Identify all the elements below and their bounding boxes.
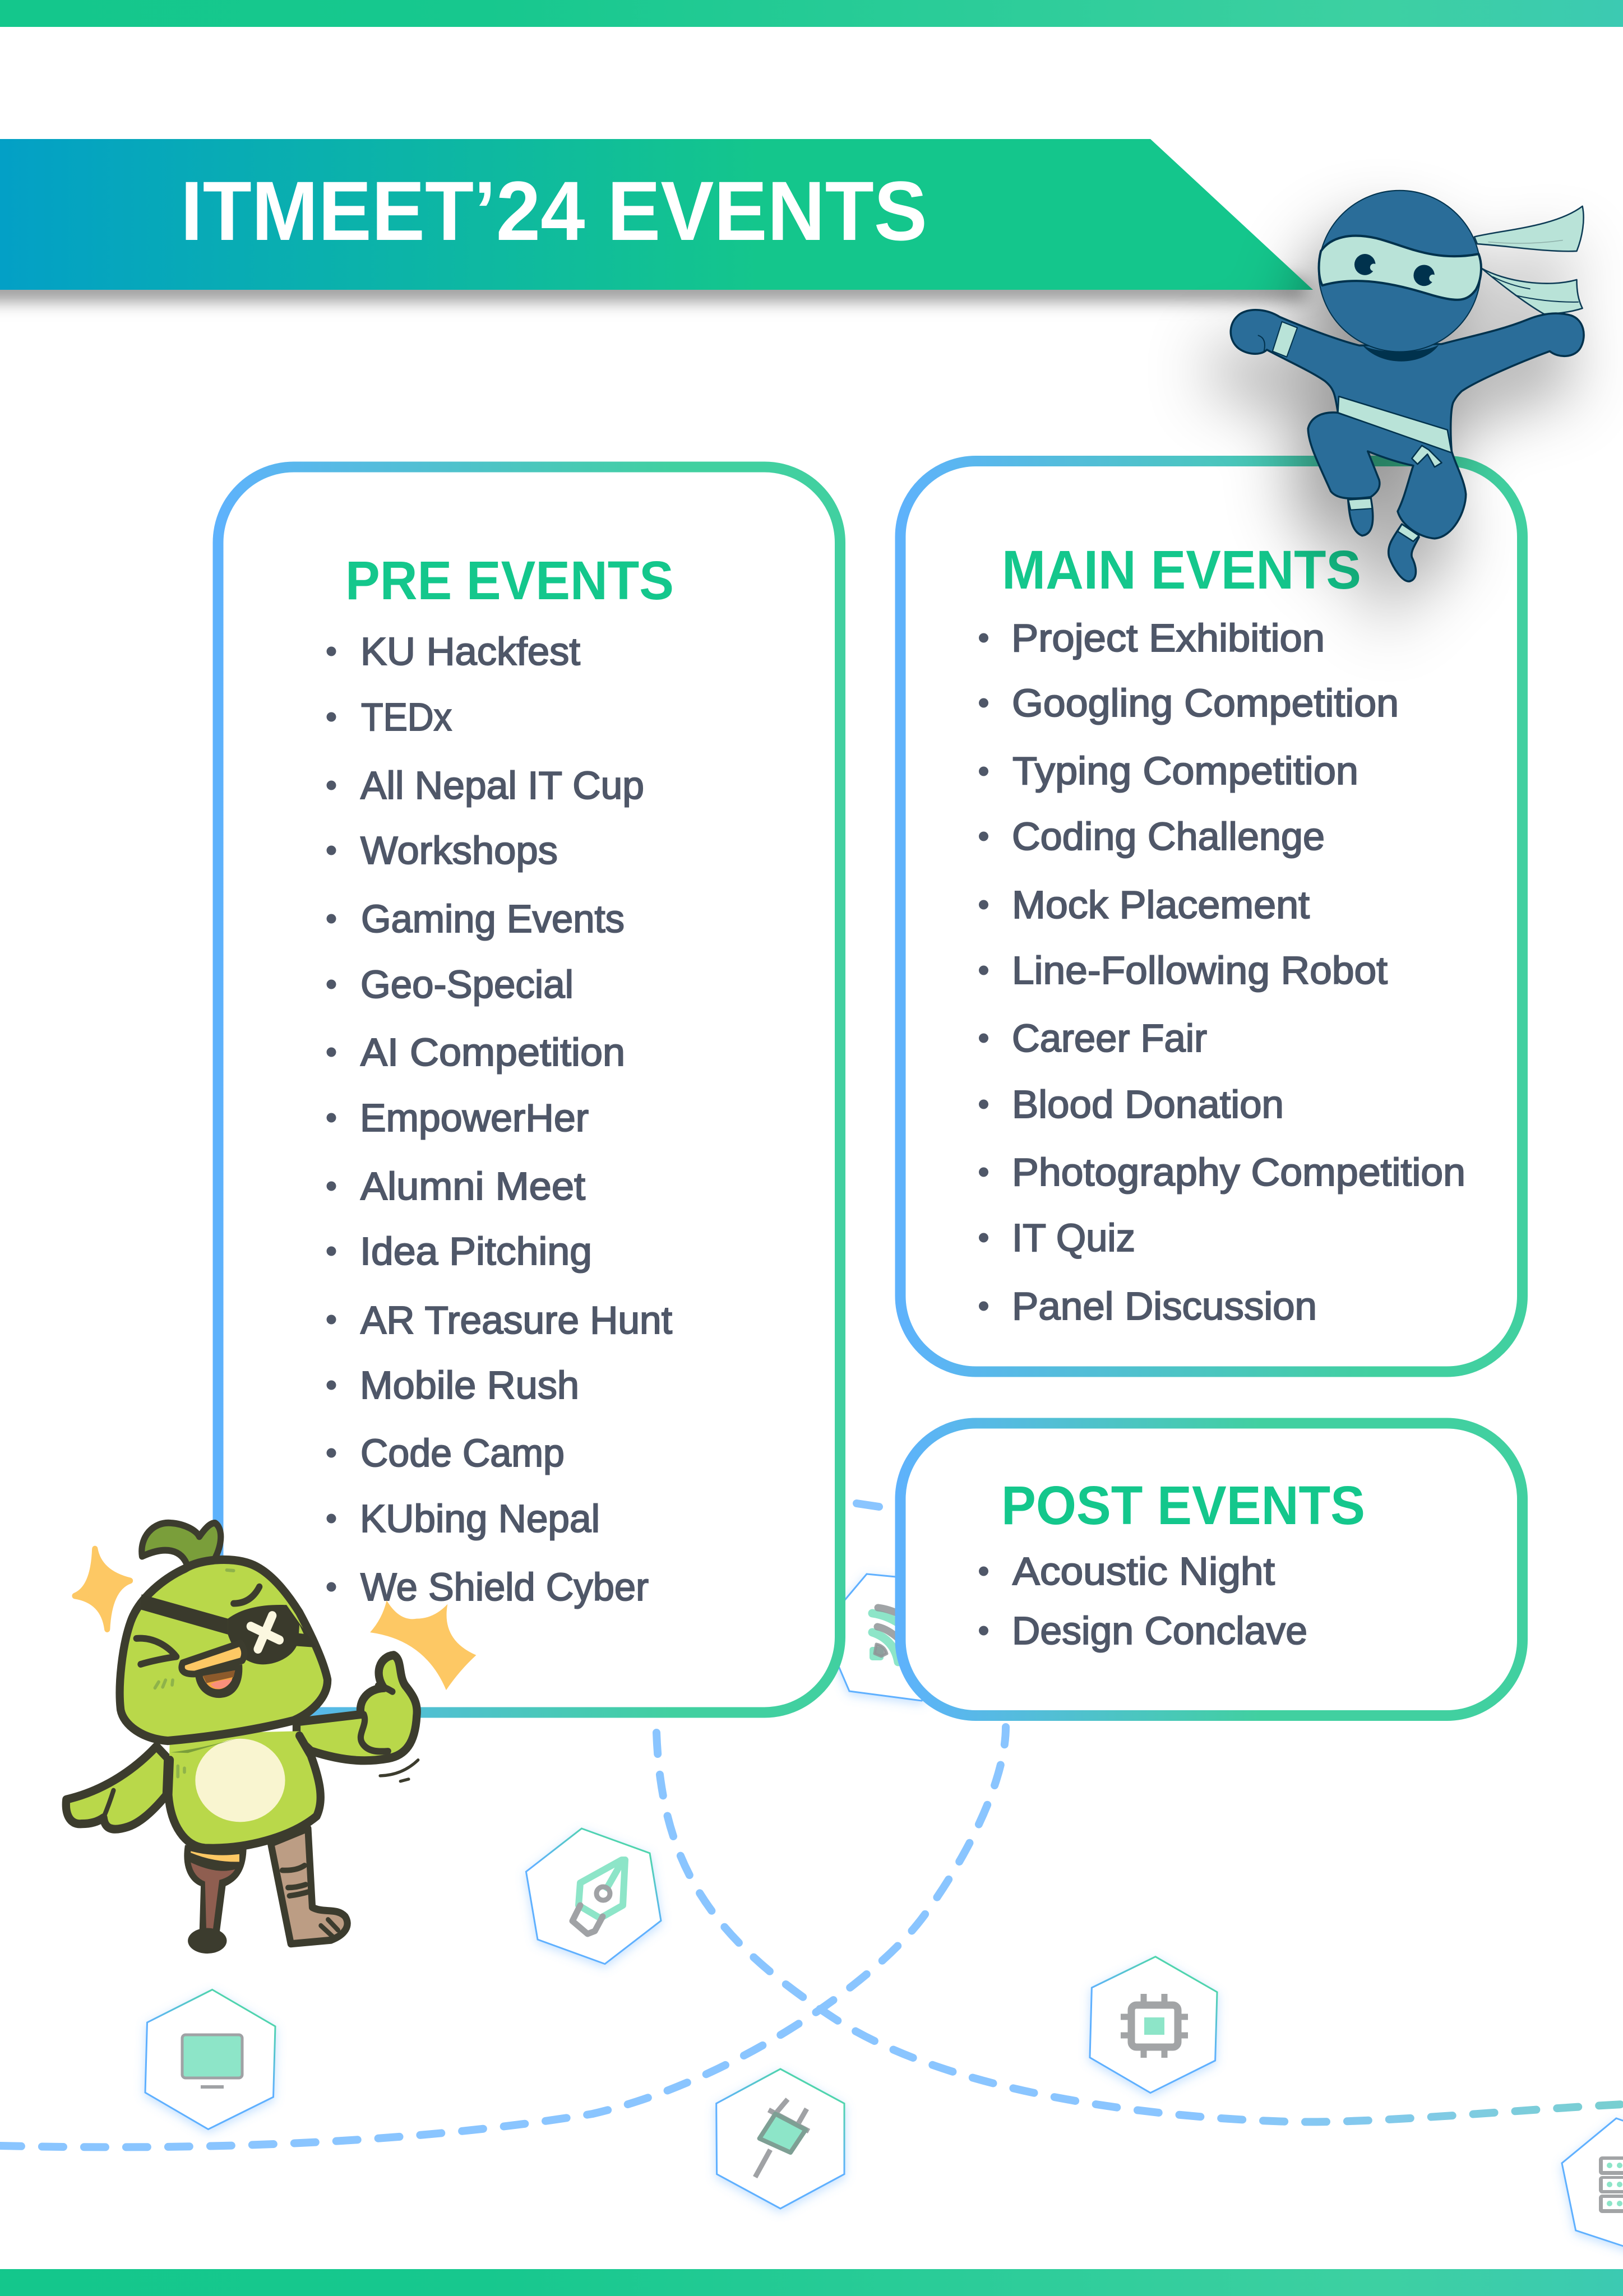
hexagon icon: server	[1562, 2118, 1623, 2251]
panel: post events	[900, 1423, 1523, 1715]
list: main events: Career Fair	[1012, 1016, 1207, 1060]
wing	[66, 1746, 168, 1829]
hexagon icon: pen tool	[526, 1829, 661, 1964]
list: pre events	[326, 629, 672, 1609]
list: pre events: Mobile Rush	[360, 1363, 579, 1407]
belt	[1338, 396, 1451, 453]
top gradient bar	[0, 0, 1623, 27]
torso and arms	[1231, 310, 1584, 451]
head	[1319, 191, 1481, 352]
wrist band	[1273, 322, 1297, 357]
list: pre events: TEDx	[361, 695, 452, 739]
cheek marks	[155, 1570, 234, 1777]
list: pre events: EmpowerHer	[360, 1096, 589, 1140]
list: main events: Coding Challenge	[1012, 814, 1325, 858]
list: pre events: KU Hackfest	[360, 629, 580, 673]
motion lines	[380, 1760, 418, 1781]
list: post events: Design Conclave	[1012, 1609, 1307, 1652]
list: main events: Typing Competition	[1012, 749, 1358, 793]
list: main events	[979, 616, 1465, 1328]
dashed connector: falling curve	[656, 1733, 1623, 2122]
list: main events: Blood Donation	[1012, 1082, 1284, 1126]
list: pre events: AI Competition	[360, 1030, 625, 1074]
panel: main events	[900, 461, 1523, 1372]
list: main events: IT Quiz	[1012, 1216, 1135, 1260]
heading: post events: POST EVENTS	[1001, 1475, 1365, 1536]
list: pre events: We Shield Cyber	[360, 1565, 649, 1609]
heading: pre events: PRE EVENTS	[345, 550, 674, 611]
body	[168, 1731, 321, 1848]
list: pre events: KUbing Nepal	[360, 1497, 600, 1540]
list: pre events: Idea Pitching	[360, 1229, 592, 1273]
bottom gradient bar	[0, 2269, 1623, 2296]
hexagon icon: plug	[716, 2069, 844, 2209]
mouth	[195, 1664, 242, 1698]
beak	[182, 1643, 244, 1674]
heading: main events: MAIN EVENTS	[1002, 539, 1361, 600]
mascot: blue ninja	[1231, 191, 1584, 581]
hexagon icon: chip	[1090, 1957, 1217, 2093]
list: pre events: AR Treasure Hunt	[360, 1298, 672, 1342]
belly	[195, 1739, 285, 1822]
list: pre events: Workshops	[360, 828, 558, 872]
hexagon icon: wifi	[822, 1574, 959, 1701]
list: main events: Googling Competition	[1012, 681, 1399, 725]
dashed connector: fragment between cards	[857, 1503, 879, 1507]
hexagon icon: monitor	[145, 1990, 275, 2129]
list: main events: Mock Placement	[1012, 883, 1310, 927]
list: pre events: Code Camp	[360, 1431, 565, 1475]
legs	[1308, 413, 1466, 581]
right sparkle	[370, 1600, 476, 1690]
list: post events	[979, 1549, 1307, 1652]
headband tails	[1474, 206, 1584, 314]
dashed connector: rising curve	[0, 1727, 1006, 2147]
list: main events: Photography Competition	[1012, 1150, 1465, 1194]
brow and wink	[136, 1587, 260, 1664]
collar	[1362, 345, 1439, 362]
list: pre events: Gaming Events	[361, 897, 625, 941]
list: pre events: All Nepal IT Cup	[360, 763, 644, 807]
arm and thumbs-up hand	[297, 1655, 417, 1761]
legs	[184, 1829, 348, 1954]
list: pre events: Alumni Meet	[360, 1164, 585, 1208]
list: post events: Acoustic Night	[1012, 1549, 1275, 1593]
list: pre events: Geo-Special	[360, 962, 574, 1006]
eyes	[1354, 254, 1436, 286]
leaf	[142, 1523, 221, 1567]
panel: pre events	[218, 467, 840, 1712]
eyepatch	[141, 1594, 317, 1664]
list: main events: Line-Following Robot	[1012, 948, 1388, 992]
mascot: green bird with eyepatch	[66, 1523, 476, 1954]
head	[120, 1559, 327, 1741]
left sparkle	[75, 1549, 130, 1630]
title: ITMEET’24 EVENTS	[181, 164, 927, 258]
list: main events: Project Exhibition	[1011, 616, 1325, 660]
headband	[1319, 236, 1481, 300]
list: main events: Panel Discussion	[1012, 1284, 1317, 1328]
title banner	[0, 139, 1313, 300]
